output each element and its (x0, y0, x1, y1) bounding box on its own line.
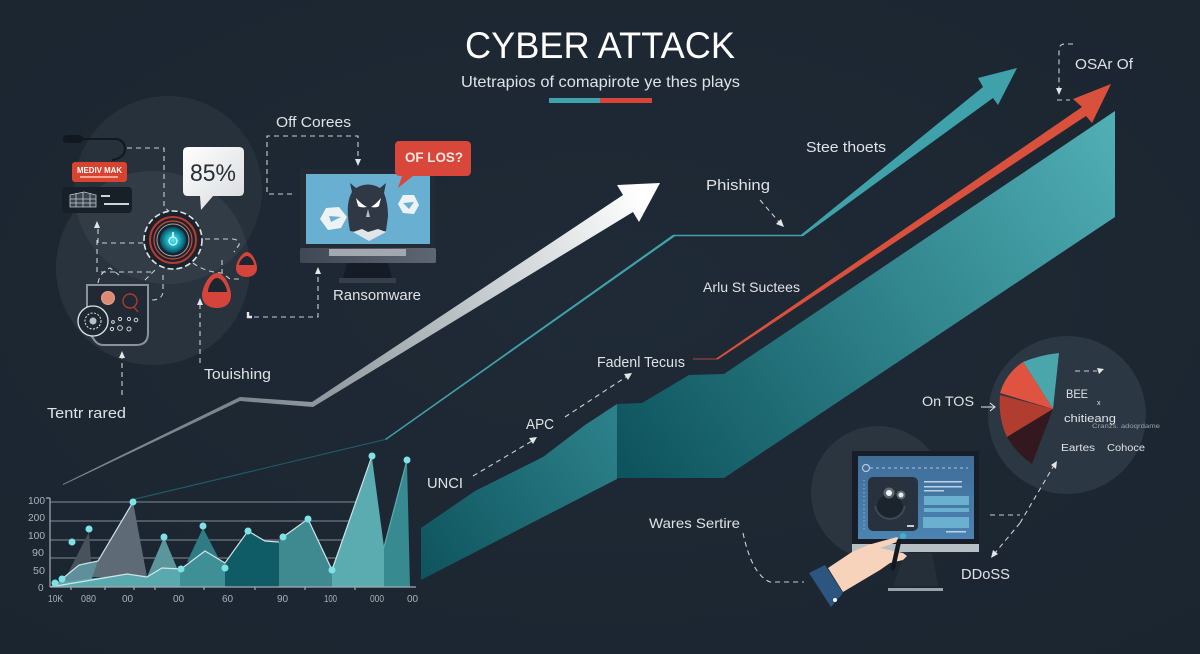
arrow: UNCI to APC (473, 437, 537, 476)
x axis labels (48, 594, 419, 605)
y axis labels (28, 496, 45, 594)
arrow: white growth (63, 183, 660, 485)
icon: padlock large (202, 273, 231, 308)
icon: right hexagon (398, 195, 419, 214)
label: BEE: BEE (1066, 387, 1088, 401)
label: Ransomware: Ransomware (333, 287, 421, 304)
panel: ransomware monitor (300, 141, 471, 283)
pie dashed pointer (1075, 368, 1104, 374)
icon: left hexagon (320, 207, 347, 230)
grid lines (50, 502, 356, 558)
screen panel with robot (868, 477, 918, 531)
label: Arlu St Suctees: Arlu St Suctees (703, 279, 800, 295)
y axis labels: 90 (32, 548, 44, 559)
label: chitieang: chitieang (1064, 413, 1116, 425)
monitor (300, 169, 436, 283)
line: faint teal chart connector (133, 440, 385, 500)
x axis labels: 00 (173, 594, 185, 605)
arrow: teal line (385, 68, 1017, 440)
device card (78, 285, 148, 345)
panel: touch monitor (809, 426, 979, 607)
x axis labels: 100 (324, 594, 337, 605)
red callout (395, 141, 471, 188)
label: Off Corees: Off Corees (276, 114, 351, 131)
x axis labels: 90 (277, 594, 289, 605)
arrow: OSAr Of (1056, 44, 1073, 100)
subtitle: Utetrapios of comapirote ye thes plays (461, 74, 740, 91)
label: Phishing: Phishing (706, 177, 770, 194)
label: DDoSS: DDoSS (961, 566, 1010, 583)
red badge: MEDIV MAK (77, 166, 122, 175)
arrow: Tentr rared to device (119, 351, 125, 395)
icon: padlock small (236, 252, 257, 277)
label: Fadenl Tecuis: Fadenl Tecuıs (597, 354, 685, 371)
pie background (988, 336, 1146, 494)
backdrop circle (811, 426, 945, 560)
x axis labels: 60 (222, 594, 234, 605)
title: CYBER ATTACK (465, 25, 735, 66)
x axis labels: 000 (370, 594, 384, 605)
title accent bar (549, 98, 652, 103)
icon: target core (144, 211, 202, 269)
background blobs (56, 96, 262, 365)
x axis labels: 00 (122, 594, 134, 605)
85% callout: 85% (190, 160, 236, 187)
cable (80, 139, 125, 160)
axes (46, 498, 416, 590)
label: On TOS: On TOS (922, 393, 974, 409)
arrow: red line (693, 84, 1111, 359)
panel: attack network illustration (56, 96, 262, 395)
label: APC: APC (526, 416, 554, 433)
y axis labels: 100 (28, 531, 45, 542)
x axis labels: 10K (48, 594, 63, 605)
icon: owl hacker (348, 183, 388, 241)
label: Eartes: Eartes (1061, 443, 1095, 454)
arrow: monitor to Touishing (248, 267, 321, 317)
label: Stee thoets: Stee thoets (806, 139, 886, 156)
y axis labels: 200 (28, 513, 45, 524)
panel: area chart (28, 452, 419, 605)
label: Tentr rared: Tentr rared (47, 405, 126, 422)
arrow: Wares Sertire to hand (743, 533, 804, 582)
area series (50, 458, 410, 587)
monitor (852, 451, 979, 591)
label: Wares Sertire: Wares Sertire (649, 515, 740, 531)
teal band chart (421, 111, 1115, 580)
arrows: DDoSS connector (990, 461, 1057, 558)
85% callout (183, 147, 244, 210)
y axis labels: 100 (28, 496, 45, 507)
data points (52, 452, 410, 586)
x axis labels: 080 (81, 594, 96, 605)
screen info panel (923, 481, 969, 532)
arrow: APC to Fadenl Tecuis (565, 373, 632, 417)
red badge (72, 162, 127, 182)
connector dashes (94, 148, 243, 300)
x axis labels: 00 (407, 594, 419, 605)
icon: hand with stylus (809, 533, 907, 607)
label: OSAr Of: OSAr Of (1075, 56, 1134, 73)
y axis labels: 50 (33, 566, 45, 577)
pie slices (1000, 353, 1059, 464)
label: Touishing: Touishing (204, 366, 271, 383)
lines (50, 456, 407, 587)
arrow: On TOS to pie (981, 403, 995, 411)
label: Cohoce: Cohoce (1107, 443, 1145, 454)
panel: pie chart (988, 336, 1161, 494)
red callout: OF LOS? (405, 149, 463, 165)
label: UNCI: UNCI (427, 475, 463, 492)
arrow: Off Corees to monitor (267, 136, 361, 194)
y axis labels: 0 (38, 583, 44, 594)
label: small caption: Cranzs. adoqrdame (1092, 424, 1161, 430)
arrow: Phishing (760, 200, 784, 227)
server card (62, 187, 132, 213)
label: x mark: x (1097, 400, 1101, 407)
arrow: Touishing to padlock (197, 298, 203, 363)
